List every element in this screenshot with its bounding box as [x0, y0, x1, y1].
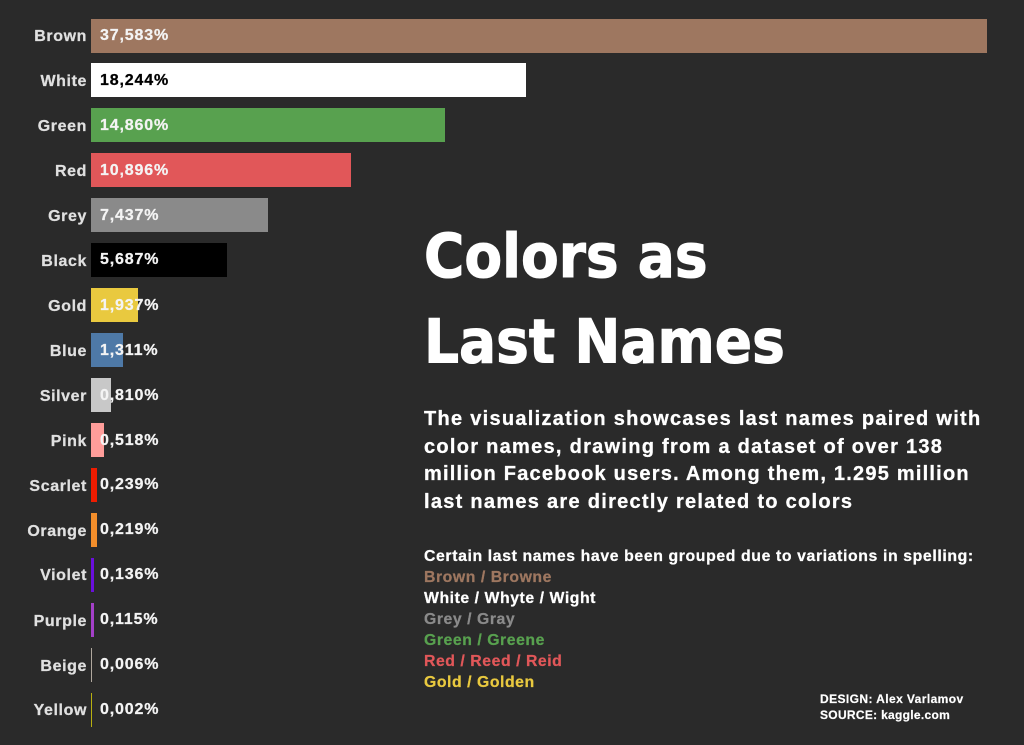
grouping note: Gold / Golden [424, 674, 535, 691]
bar: Grey [48, 198, 268, 232]
grouping note: Grey / Gray [424, 611, 515, 628]
title: Colors as [424, 221, 708, 291]
bar: Brown: Brown [34, 28, 87, 44]
description: color names, drawing from a dataset of over 138 [424, 436, 943, 458]
description: The visualization showcases last names paired with [424, 408, 982, 430]
grouping note: Red / Reed / Reid [424, 653, 562, 670]
title: Last Names [424, 307, 785, 377]
bar: Green: 14,860% [100, 117, 169, 134]
credits: SOURCE: kaggle.com [820, 708, 950, 722]
bar: Red [55, 153, 351, 187]
bar: Grey: 7,437% [100, 207, 159, 224]
description: last names are directly related to colors [424, 490, 853, 512]
grouping note [424, 548, 974, 691]
bar: Orange: Orange [27, 523, 87, 540]
bar: Yellow: 0,002% [100, 701, 159, 718]
bar: Silver [40, 378, 159, 412]
credits [820, 692, 964, 722]
bar: Violet: Violet [40, 567, 87, 584]
bar: White [40, 63, 526, 97]
bar: Beige [40, 648, 159, 682]
grouping note: Brown / Browne [424, 569, 552, 586]
bar: Black: 5,687% [100, 251, 159, 268]
bar: Yellow [34, 693, 159, 727]
grouping note: White / Whyte / Wight [424, 590, 596, 607]
bar: White: 18,244% [100, 72, 169, 89]
bar: Gold: Gold [48, 298, 87, 315]
bar: Purple: 0,115% [100, 611, 158, 628]
bar: Orange [27, 513, 159, 547]
bar: Black [41, 243, 227, 277]
bar: Silver: 0,810% [100, 387, 159, 404]
grouping note: Certain last names have been grouped due to variations in spelling: [424, 548, 974, 565]
bar: Orange: 0,219% [100, 521, 159, 538]
title [424, 221, 785, 377]
bar: Scarlet: 0,239% [100, 476, 159, 493]
bar: Pink: Pink [51, 433, 87, 450]
bar: Pink [51, 423, 159, 457]
bar: Black: Black [41, 253, 87, 270]
description [424, 408, 982, 512]
bar: Violet [40, 558, 159, 592]
bar: Gold [48, 288, 159, 322]
bar: White: White [40, 73, 87, 90]
bar: Green: Green [38, 118, 87, 135]
grouping note: Green / Greene [424, 632, 545, 649]
bar: Beige: 0,006% [100, 656, 159, 673]
bar: Blue: 1,311% [100, 342, 158, 359]
bar: Violet: 0,136% [100, 566, 159, 583]
bar: Beige: Beige [40, 658, 87, 675]
bar: Blue: Blue [50, 343, 87, 360]
bar: Silver: Silver [40, 388, 87, 405]
bar: Red: 10,896% [100, 162, 169, 179]
bar: Purple [34, 603, 158, 637]
bar: Scarlet [29, 468, 159, 502]
bar: Gold: 1,937% [100, 297, 159, 314]
bar: Blue [50, 333, 158, 367]
description: million Facebook users. Among them, 1.295 million [424, 463, 970, 485]
bar: Brown [34, 19, 987, 53]
bar: Grey: Grey [48, 208, 87, 225]
bar: Purple: Purple [34, 613, 87, 630]
credits: DESIGN: Alex Varlamov [820, 692, 964, 706]
bar: Brown: 37,583% [100, 26, 169, 44]
bar: Green [38, 108, 445, 142]
bar: Scarlet: Scarlet [29, 478, 87, 495]
bar: Pink: 0,518% [100, 432, 159, 449]
bar: Yellow: Yellow [34, 702, 87, 719]
bar: Red: Red [55, 163, 87, 180]
